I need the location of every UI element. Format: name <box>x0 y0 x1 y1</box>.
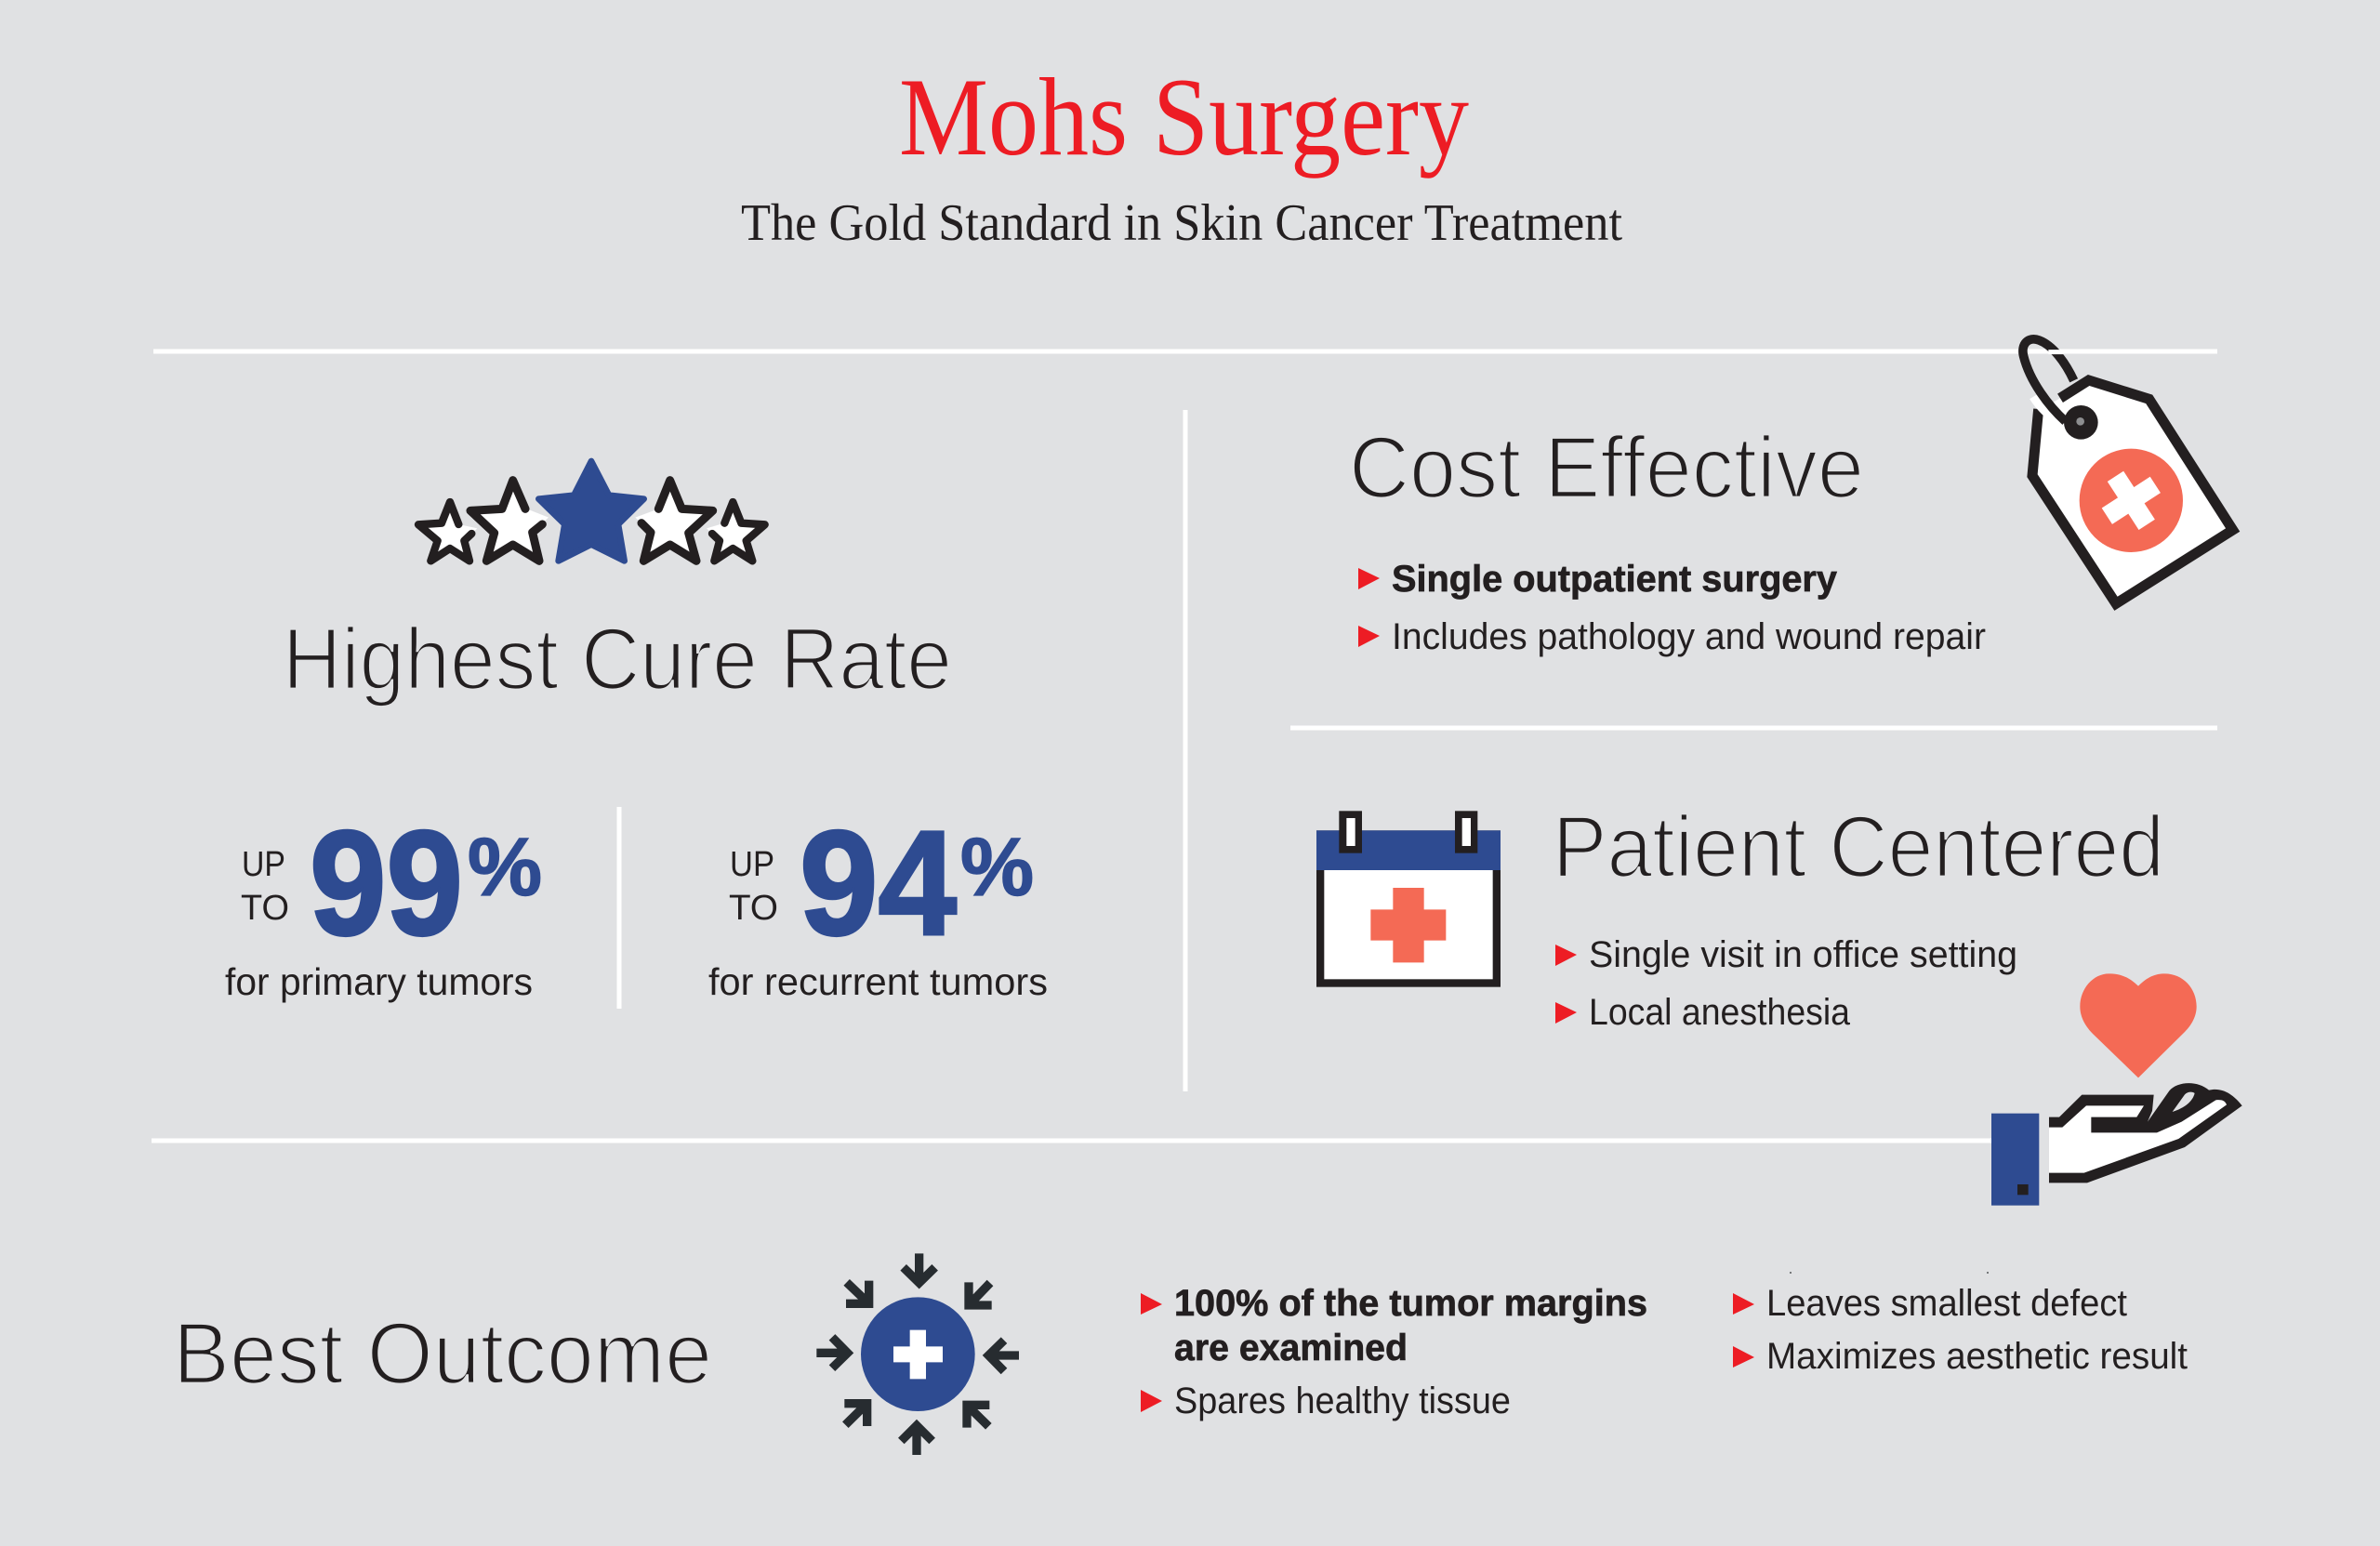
panel: best outcome <box>173 1253 2188 1455</box>
bullet list: patient centered: Single visit in office setting <box>1589 934 2017 975</box>
stat: 99 percent for primary tumors: for primary tumors <box>225 960 533 1003</box>
bullet list: tumor margins and healthy tissue: 100% of the tumor margins <box>1174 1283 1647 1324</box>
bullet list: tumor margins and healthy tissue: are examined <box>1174 1328 1408 1368</box>
stat: 94 percent for recurrent tumors: 94 <box>800 799 957 966</box>
icon: arrows pointing to medical cross <box>816 1253 1019 1455</box>
bullet list: patient centered <box>1555 934 2017 1033</box>
stat: 94 percent for recurrent tumors: % <box>960 821 1034 913</box>
stat: 94 percent for recurrent tumors <box>708 799 1048 1003</box>
heading: cost effective: Cost Effective <box>1349 418 1864 516</box>
bullet list: tumor margins and healthy tissue: Spares healthy tissue <box>1174 1381 1511 1421</box>
stat: 99 percent for primary tumors: UP <box>242 845 285 884</box>
stat: 94 percent for recurrent tumors: TO <box>729 889 778 928</box>
icon: calendar <box>1316 811 1501 987</box>
bullet list: defect and aesthetic result: Leaves smallest defect <box>1766 1283 2127 1324</box>
icon: hand holding heart <box>1991 973 2242 1206</box>
bullet list: cost effective: Single outpatient surgery <box>1392 559 1838 600</box>
panel: highest cure rate <box>225 461 1048 1003</box>
heading: patient centered: Patient Centered <box>1553 798 2164 895</box>
stat: 99 percent for primary tumors: % <box>468 821 542 913</box>
stat: 99 percent for primary tumors: 99 <box>310 799 463 966</box>
bullet list: defect and aesthetic result <box>1733 1283 2188 1377</box>
bullet list: cost effective <box>1358 559 1986 657</box>
stat: 99 percent for primary tumors <box>225 799 542 1003</box>
stat: 99 percent for primary tumors: TO <box>241 889 289 928</box>
subtitle: The Gold Standard in Skin Cancer Treatment <box>741 194 1622 252</box>
bullet list: tumor margins and healthy tissue <box>1141 1283 1647 1421</box>
icon: five stars <box>418 461 765 561</box>
stat: 94 percent for recurrent tumors: UP <box>730 845 774 884</box>
panel: cost effective <box>1349 339 2233 657</box>
bullet list: defect and aesthetic result: Maximizes aesthetic result <box>1766 1336 2188 1377</box>
icon: price tag <box>2023 339 2233 603</box>
panel: patient centered <box>1316 798 2242 1206</box>
title: Mohs Surgery <box>899 55 1469 178</box>
heading: highest cure rate: Highest Cure Rate <box>283 610 952 707</box>
stat: 94 percent for recurrent tumors: for recurrent tumors <box>708 960 1048 1003</box>
bullet list: cost effective: Includes pathology and wound repair <box>1392 616 1986 657</box>
header: title and subtitle <box>741 55 1622 252</box>
heading: best outcome: Best Outcome <box>173 1304 712 1402</box>
bullet list: patient centered: Local anesthesia <box>1589 992 1851 1033</box>
